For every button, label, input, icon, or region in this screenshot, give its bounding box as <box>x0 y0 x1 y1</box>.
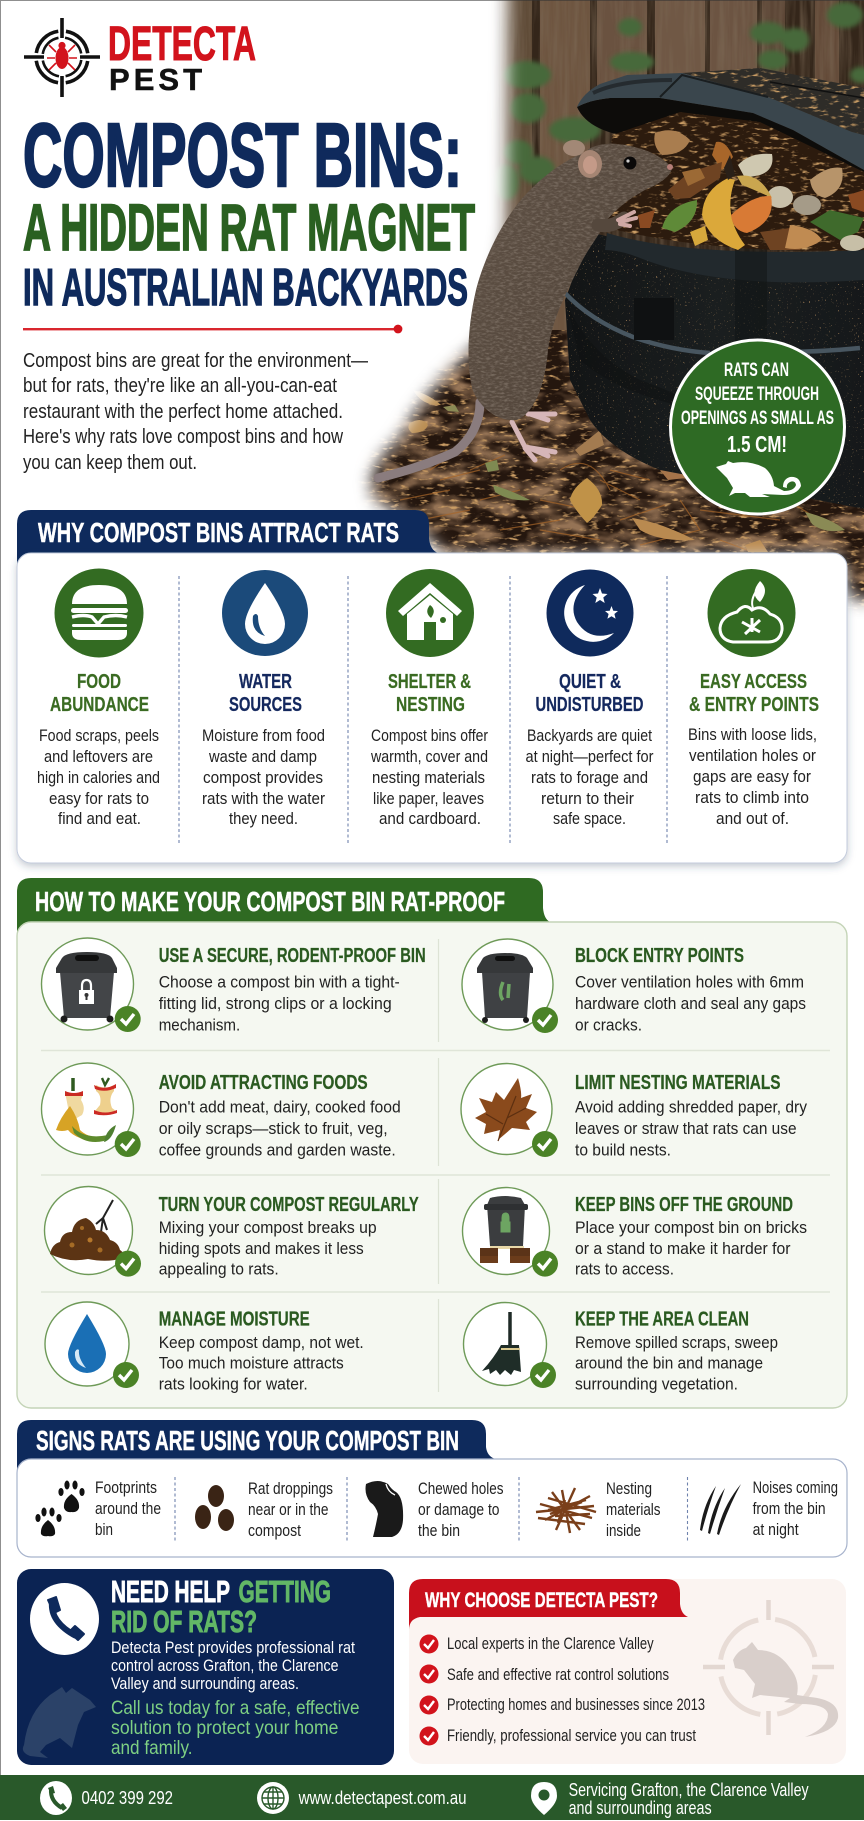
step: keep bins off the ground: Place your compost bin on bricks <box>575 1219 807 1237</box>
tab: why choose heading <box>409 1579 688 1630</box>
step: turn your compost regularly: hiding spots and makes it less <box>159 1240 364 1258</box>
compost contents <box>600 110 864 255</box>
item: easy access and entry points: & ENTRY POINTS <box>689 693 819 716</box>
rat tail and hind feet <box>378 402 480 478</box>
sign: footprints <box>35 1479 161 1539</box>
item: shelter and nesting: and cardboard. <box>379 810 481 828</box>
sign: noises: at night <box>753 1521 799 1539</box>
title: COMPOST BINS: <box>23 106 462 206</box>
item: easy access and entry points: gaps are easy for <box>693 768 811 786</box>
item: food abundance <box>37 568 160 828</box>
badge: squeeze fact <box>670 340 844 514</box>
icon: check badge <box>532 1007 558 1033</box>
icon: compost pile with fork <box>44 1186 132 1274</box>
step: block entry points: BLOCK ENTRY POINTS <box>575 945 744 967</box>
icon: globe <box>257 1782 289 1814</box>
sign: nesting materials: Nesting <box>606 1480 652 1498</box>
step: turn your compost regularly <box>44 1186 419 1279</box>
body text <box>111 1638 355 1693</box>
sign: noises <box>700 1479 838 1539</box>
section tab: signs rats are using your compost bin: SIGNS RATS ARE USING YOUR COMPOST BIN <box>36 1425 459 1456</box>
item: shelter and nesting: NESTING <box>396 693 465 716</box>
icon: check badge <box>115 1006 141 1032</box>
section tab: how to make your compost bin rat-proof <box>17 878 550 940</box>
body text: control across Grafton, the Clarence <box>111 1656 338 1675</box>
item: easy access and entry points <box>688 569 819 828</box>
list: reasons: Protecting homes and businesses since 2013 <box>447 1696 705 1714</box>
sign: chewed holes <box>366 1480 504 1540</box>
step: manage moisture: rats looking for water. <box>159 1376 308 1394</box>
item: shelter and nesting: like paper, leaves <box>373 790 484 808</box>
icon: broom <box>464 1302 546 1386</box>
icon: paw prints <box>35 1480 85 1536</box>
body text: Detecta Pest provides professional rat <box>111 1638 355 1657</box>
step: turn your compost regularly: Mixing your compost breaks up <box>159 1219 377 1237</box>
item: food abundance: find and eat. <box>58 810 141 828</box>
step: turn your compost regularly: appealing to rats. <box>159 1261 279 1279</box>
icon: check badge <box>530 1362 556 1388</box>
icon: check badge <box>532 1251 558 1277</box>
step: keep bins off the ground: rats to access. <box>575 1261 674 1279</box>
sign: nesting materials: inside <box>606 1522 641 1540</box>
icon: food scraps <box>42 1063 134 1155</box>
icon: phone circle <box>30 1583 99 1655</box>
sign: chewed holes: or damage to <box>418 1501 500 1519</box>
step: keep the area clean: surrounding vegetation. <box>575 1376 738 1394</box>
item: shelter and nesting: nesting materials <box>372 769 485 787</box>
icon: burger <box>54 568 144 658</box>
item: shelter and nesting: warmth, cover and <box>370 748 488 766</box>
icon: check badge <box>532 1131 558 1157</box>
step: use a secure bin: fitting lid, strong clips or a locking <box>159 995 392 1013</box>
footer bar: and surrounding areas <box>569 1798 712 1818</box>
title <box>23 106 475 317</box>
step: block entry points <box>462 939 806 1034</box>
logo <box>24 18 256 97</box>
panel: signs of rats <box>17 1459 847 1557</box>
step: limit nesting materials: LIMIT NESTING MATERIALS <box>575 1072 780 1094</box>
item: food abundance: ABUNDANCE <box>50 693 149 716</box>
sign: nesting materials <box>536 1480 660 1540</box>
step: avoid attracting foods <box>42 1063 401 1160</box>
item: food abundance: and leftovers are <box>44 748 153 766</box>
item: water sources: rats with the water <box>202 790 325 808</box>
heading <box>111 1574 331 1639</box>
icon: moon and stars <box>546 570 634 656</box>
sign: footprints: Footprints <box>95 1479 157 1497</box>
item: water sources: they need. <box>229 810 298 828</box>
icon: sprout and compost cloud <box>708 569 796 657</box>
tab: why choose heading: WHY CHOOSE DETECTA PEST? <box>425 1588 658 1612</box>
title: IN AUSTRALIAN BACKYARDS <box>23 259 468 317</box>
sign: droppings: Rat droppings <box>248 1480 333 1498</box>
sign: footprints: around the <box>95 1500 161 1518</box>
compost bin body <box>560 228 864 510</box>
step: limit nesting materials: to build nests. <box>575 1142 671 1160</box>
icon: house <box>386 569 474 657</box>
item: shelter and nesting <box>370 569 488 828</box>
step: block entry points: hardware cloth and seal any gaps <box>575 995 806 1013</box>
intro paragraph <box>23 350 368 474</box>
sign: droppings <box>195 1480 333 1540</box>
icon: bin on bricks <box>462 1188 550 1274</box>
icon: phone <box>40 1781 72 1815</box>
item: shelter and nesting: Compost bins offer <box>371 727 488 745</box>
item: quiet and undisturbed: at night—perfect for <box>526 748 654 766</box>
list: reasons: Safe and effective rat control solutions <box>447 1666 669 1684</box>
icon: twigs <box>536 1488 596 1533</box>
step: use a secure bin: USE A SECURE, RODENT-PROOF BIN <box>159 945 426 967</box>
step: keep the area clean: around the bin and manage <box>575 1355 763 1373</box>
step: manage moisture: Keep compost damp, not wet. <box>159 1334 364 1352</box>
icon: water drop <box>222 570 308 656</box>
list: reasons <box>420 1634 705 1746</box>
item: shelter and nesting: SHELTER & <box>388 670 471 693</box>
item: water sources: SOURCES <box>229 693 302 716</box>
intro paragraph: restaurant with the perfect home attached. <box>23 401 343 423</box>
step: manage moisture <box>45 1302 364 1394</box>
step: avoid attracting foods: Don't add meat, dairy, cooked food <box>159 1098 401 1116</box>
item: easy access and entry points: EASY ACCESS <box>700 670 807 693</box>
item: quiet and undisturbed: Backyards are quiet <box>527 727 652 745</box>
step: block entry points: Cover ventilation holes with 6mm <box>575 974 804 992</box>
icon: chewed bin <box>366 1481 403 1537</box>
sign: droppings: near or in the <box>248 1501 328 1519</box>
compost bin lid <box>682 68 864 135</box>
step: avoid attracting foods: coffee grounds and garden waste. <box>159 1142 396 1160</box>
item: easy access and entry points: ventilation holes or <box>689 747 816 765</box>
icon: ghost rat <box>23 1687 96 1758</box>
panel: need help call to action <box>17 1569 394 1765</box>
hero photo: rat at compost bin <box>340 0 864 640</box>
sign: chewed holes: the bin <box>418 1522 460 1540</box>
intro paragraph: you can keep them out. <box>23 452 197 474</box>
item: water sources: waste and damp <box>208 748 317 766</box>
panel: rat-proofing steps <box>17 922 847 1408</box>
step: avoid attracting foods: or oily scraps—stick to fruit, veg, <box>159 1120 388 1138</box>
section tab: signs rats are using your compost bin <box>17 1420 495 1476</box>
call us text: and family. <box>111 1738 192 1759</box>
title rule with dot <box>23 325 402 333</box>
call us text: solution to protect your home <box>111 1718 338 1739</box>
item: quiet and undisturbed <box>526 570 654 828</box>
icon: bin with mesh <box>462 939 553 1030</box>
item: quiet and undisturbed: QUIET & <box>559 670 621 693</box>
footer bar: Servicing Grafton, the Clarence Valley <box>569 1780 809 1800</box>
lid underside <box>577 98 864 175</box>
icon: crosshair with bug <box>24 18 100 97</box>
badge: squeeze fact: RATS CAN <box>724 360 789 381</box>
sign: footprints: bin <box>95 1521 113 1539</box>
panel: why choose detecta pest <box>409 1579 846 1764</box>
step: avoid attracting foods: AVOID ATTRACTING FOODS <box>159 1072 368 1094</box>
badge: squeeze fact: 1.5 CM! <box>727 431 787 457</box>
call us text: Call us today for a safe, effective <box>111 1698 360 1719</box>
rat body <box>469 144 672 420</box>
item: quiet and undisturbed: UNDISTURBED <box>536 693 644 716</box>
heading: NEED HELP <box>111 1574 230 1609</box>
step: keep bins off the ground: KEEP BINS OFF THE GROUND <box>575 1194 793 1216</box>
sign: droppings: compost <box>248 1522 301 1540</box>
icon: claw scratches <box>700 1484 741 1535</box>
icon: white rat <box>716 461 801 497</box>
logo: DETECTA <box>108 18 256 71</box>
step: turn your compost regularly: TURN YOUR COMPOST REGULARLY <box>159 1194 419 1216</box>
icon: location pin <box>531 1782 557 1815</box>
item: quiet and undisturbed: return to their <box>541 790 634 808</box>
intro paragraph: Here's why rats love compost bins and how <box>23 426 343 448</box>
step: keep bins off the ground: or a stand to make it harder for <box>575 1240 791 1258</box>
icon: check badge <box>113 1362 139 1388</box>
step: block entry points: or cracks. <box>575 1016 642 1034</box>
step: limit nesting materials: leaves or straw that rats can use <box>575 1120 796 1138</box>
item: water sources: Moisture from food <box>202 727 325 745</box>
item: food abundance: Food scraps, peels <box>39 727 159 745</box>
icon: check badge <box>115 1251 141 1277</box>
sign: noises: from the bin <box>753 1500 826 1518</box>
panel: why compost bins attract rats <box>17 553 847 863</box>
icon: ghost target and rat <box>703 1600 838 1737</box>
sign: nesting materials: materials <box>606 1501 660 1519</box>
icon: check badge <box>115 1131 141 1157</box>
sign: chewed holes: Chewed holes <box>418 1480 504 1498</box>
step: keep bins off the ground <box>462 1188 807 1279</box>
call us text <box>111 1698 360 1759</box>
section tab: why compost bins attract rats: WHY COMPOST BINS ATTRACT RATS <box>38 517 399 548</box>
step: keep the area clean: KEEP THE AREA CLEAN <box>575 1309 749 1331</box>
item: easy access and entry points: Bins with loose lids, <box>688 726 817 744</box>
item: water sources <box>202 570 325 828</box>
section tab: why compost bins attract rats <box>17 510 438 570</box>
item: quiet and undisturbed: safe space. <box>553 810 626 828</box>
title: A HIDDEN RAT MAGNET <box>23 190 475 264</box>
list: reasons: Friendly, professional service you can trust <box>447 1727 696 1745</box>
item: food abundance: easy for rats to <box>49 790 149 808</box>
item: water sources: compost provides <box>203 769 323 787</box>
step: keep the area clean <box>464 1302 778 1394</box>
item: easy access and entry points: and out of. <box>716 810 789 828</box>
icon: rat droppings <box>195 1485 234 1531</box>
step: limit nesting materials: Avoid adding shredded paper, dry <box>575 1098 808 1116</box>
footer bar <box>0 1775 864 1820</box>
step: limit nesting materials <box>461 1064 808 1160</box>
step: manage moisture: Too much moisture attracts <box>159 1355 344 1373</box>
item: water sources: WATER <box>239 670 292 693</box>
sign: noises: Noises coming <box>753 1479 838 1497</box>
item: food abundance: FOOD <box>77 670 121 693</box>
list: reasons: Local experts in the Clarence Valley <box>447 1635 654 1653</box>
step: keep the area clean: Remove spilled scraps, sweep <box>575 1334 778 1352</box>
icon: locked bin <box>42 938 134 1030</box>
icon: autumn leaf <box>461 1064 552 1154</box>
intro paragraph: Compost bins are great for the environment— <box>23 350 368 372</box>
intro paragraph: but for rats, they're like an all-you-can-eat <box>23 375 337 397</box>
body text: Valley and surrounding areas. <box>111 1674 299 1693</box>
footer bar: www.detectapest.com.au <box>298 1787 467 1808</box>
step: use a secure bin: Choose a compost bin with a tight- <box>159 974 400 992</box>
heading: GETTING <box>238 1574 331 1609</box>
heading: RID OF RATS? <box>111 1604 257 1639</box>
item: easy access and entry points: rats to climb into <box>695 789 809 807</box>
logo: PEST <box>109 62 202 97</box>
step: manage moisture: MANAGE MOISTURE <box>159 1309 310 1331</box>
item: quiet and undisturbed: rats to forage and <box>531 769 648 787</box>
footer bar: 0402 399 292 <box>82 1787 173 1808</box>
item: food abundance: high in calories and <box>37 769 160 787</box>
leaves on the ground <box>408 390 845 552</box>
step: use a secure bin: mechanism. <box>159 1016 240 1034</box>
icon: blue drop <box>45 1302 129 1386</box>
section tab: how to make your compost bin rat-proof: HOW TO MAKE YOUR COMPOST BIN RAT-PROOF <box>35 886 505 917</box>
step: use a secure bin <box>42 938 426 1034</box>
